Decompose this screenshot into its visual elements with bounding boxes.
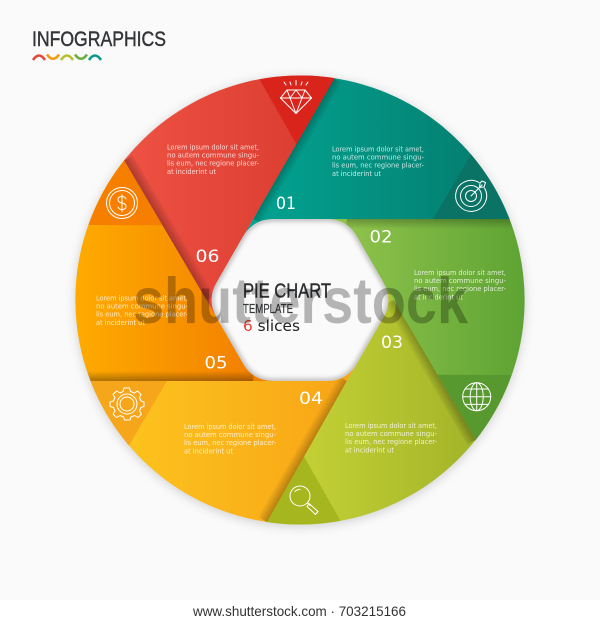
text block: slice 03: at inciderint ut bbox=[345, 446, 394, 454]
text block: slice 06: lis eum, nec regione placer- bbox=[167, 160, 259, 168]
icon: globe bbox=[463, 383, 491, 411]
subheading: TEMPLATE: TEMPLATE bbox=[243, 301, 293, 316]
text block: slice 03: no autem commune singu- bbox=[345, 430, 437, 438]
central hexagon bbox=[212, 219, 388, 381]
icon: dollar coin bbox=[106, 188, 138, 218]
text block: slice 01 bbox=[332, 146, 424, 178]
panel: slice 03 yellow-green bbox=[266, 278, 476, 525]
watermark: shutterstock: shutterstock bbox=[133, 264, 469, 337]
text block: slice 01: lis eum, nec regione placer- bbox=[332, 162, 424, 170]
text block: slice 05 bbox=[96, 294, 188, 327]
icon: target bbox=[456, 180, 487, 211]
heading: PIE CHART: PIE CHART bbox=[243, 280, 331, 302]
text block: slice 02 bbox=[414, 269, 506, 301]
subheading: 6 slices: 6 slices bbox=[243, 317, 300, 335]
panel: slice 05 orange bbox=[75, 159, 278, 381]
panel: slice 02 green bbox=[322, 219, 525, 441]
number 01: 01 bbox=[276, 194, 296, 213]
text block: slice 02: Lorem ipsum dolor sit amet, bbox=[414, 269, 506, 277]
text block: slice 02: lis eum, nec regione placer- bbox=[414, 285, 506, 293]
text block: slice 03: lis eum, nec regione placer- bbox=[345, 438, 437, 446]
icon: magnifier bbox=[290, 486, 318, 514]
text block: slice 04: Lorem ipsum dolor sit amet, bbox=[184, 423, 276, 431]
panel: slice 01 teal bbox=[241, 78, 509, 241]
text block: slice 01: at inciderint ut bbox=[332, 170, 381, 178]
number 04: 04 bbox=[299, 389, 323, 408]
text block: slice 05: at inciderint ut bbox=[96, 319, 145, 327]
circle drop shadow bbox=[75, 77, 525, 527]
text block: slice 05: no autem commune singu- bbox=[96, 302, 188, 310]
panel: slice 06 red bbox=[124, 75, 334, 322]
text block: slice 04: at inciderint ut bbox=[184, 447, 233, 455]
icon: gear bbox=[110, 388, 144, 420]
text block: slice 06 bbox=[167, 144, 259, 176]
number 06: 06 bbox=[196, 247, 220, 266]
number 03: 03 bbox=[381, 333, 403, 352]
text block: slice 04: lis eum, nec regione placer- bbox=[184, 439, 276, 447]
text block: slice 02: at inciderint ut bbox=[414, 293, 463, 301]
text block: slice 06: no autem commune singu- bbox=[167, 152, 259, 160]
text block: slice 05: lis eum, nec regione placer- bbox=[96, 311, 188, 319]
text block: slice 01: Lorem ipsum dolor sit amet, bbox=[332, 146, 424, 154]
number 05: 05 bbox=[204, 354, 228, 372]
text block: slice 02: no autem commune singu- bbox=[414, 277, 506, 285]
title: INFOGRAPHICS: INFOGRAPHICS bbox=[32, 27, 166, 51]
text block: slice 06: Lorem ipsum dolor sit amet, bbox=[167, 144, 259, 152]
decorative coloured wave under title bbox=[33, 54, 101, 60]
footer: image id: www.shutterstock.com · 703215166 bbox=[192, 603, 406, 619]
text block: slice 01: no autem commune singu- bbox=[332, 154, 424, 162]
number 02: 02 bbox=[370, 228, 392, 246]
text block: slice 03 bbox=[345, 422, 437, 454]
text block: slice 05: Lorem ipsum dolor sit amet, bbox=[96, 294, 188, 302]
panel: slice 04 yellow bbox=[90, 359, 359, 522]
icon: diamond bbox=[280, 80, 312, 114]
text block: slice 03: Lorem ipsum dolor sit amet, bbox=[345, 422, 437, 430]
text block: slice 04: no autem commune singu- bbox=[184, 431, 276, 439]
text block: slice 04 bbox=[184, 423, 276, 455]
text block: slice 06: at inciderint ut bbox=[167, 168, 216, 176]
